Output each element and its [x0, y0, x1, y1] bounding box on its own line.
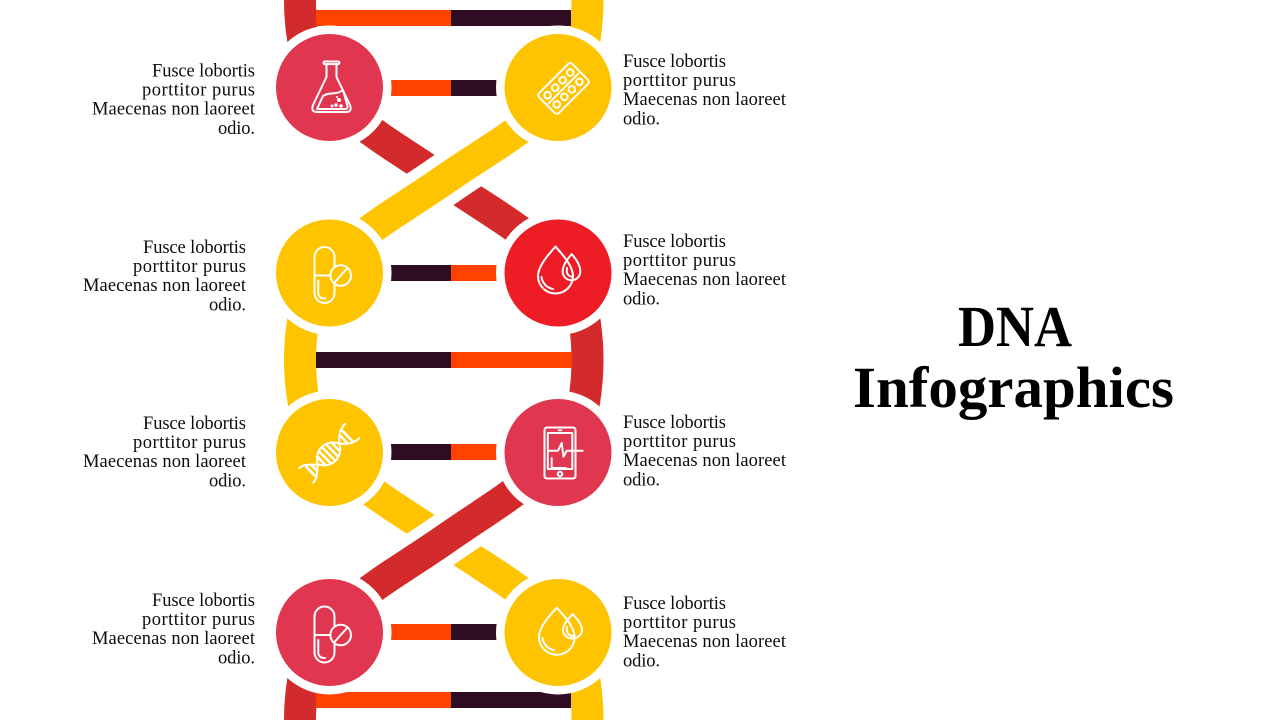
text: left row 3: Maecenas non laoreet — [83, 452, 247, 472]
text: left row 1: odio. — [218, 119, 255, 139]
text: right row 2: Fusce lobortis — [623, 232, 726, 252]
text: right row 3: Fusce lobortis — [623, 413, 726, 433]
bottom long bar — [316, 692, 571, 708]
text: right row 4: Maecenas non laoreet — [623, 632, 787, 652]
text: left row 4: Fusce lobortis — [152, 591, 255, 611]
text: left row 2 — [83, 238, 247, 315]
middle strand arcs — [300, 290, 588, 430]
node: drops red — [496, 211, 620, 335]
text: right row 4: odio. — [623, 651, 660, 671]
text: right row 1: porttitor purus — [623, 71, 736, 91]
text: left row 1 — [92, 62, 256, 139]
node: capsule red — [268, 570, 392, 694]
text: right row 2: odio. — [623, 289, 660, 309]
text: right row 3 — [623, 413, 787, 490]
icon: water drops — [539, 608, 582, 655]
lower crossing strands — [346, 472, 543, 608]
icon: blister pack — [537, 62, 590, 115]
text: left row 2: Maecenas non laoreet — [83, 276, 247, 296]
text: right row 4: porttitor purus — [623, 613, 736, 633]
text: right row 4 — [623, 594, 787, 671]
text: right row 4: Fusce lobortis — [623, 594, 726, 614]
text: left row 4 — [92, 591, 256, 668]
text: left row 2: odio. — [209, 295, 246, 315]
title — [853, 294, 1174, 420]
text: left row 3: porttitor purus — [133, 433, 246, 453]
text: right row 2: Maecenas non laoreet — [623, 270, 787, 290]
text: left row 3: Fusce lobortis — [143, 414, 246, 434]
text: left row 2: Fusce lobortis — [143, 238, 246, 258]
text: left row 4: odio. — [218, 648, 255, 668]
node: drops yellow — [496, 570, 620, 694]
text: left row 1: porttitor purus — [142, 81, 255, 101]
title: Infographics — [853, 355, 1174, 420]
text: left row 3: odio. — [209, 471, 246, 491]
text: right row 1: Maecenas non laoreet — [623, 90, 787, 110]
text: right row 3: porttitor purus — [623, 432, 736, 452]
node: capsule yellow — [268, 211, 392, 335]
top strand arcs — [300, 0, 588, 70]
base pair bars — [316, 10, 572, 708]
icon: dna helix — [299, 424, 359, 483]
title: DNA — [958, 294, 1072, 359]
icon: flask — [312, 62, 351, 112]
node: flask — [268, 26, 392, 150]
text: left row 4: porttitor purus — [142, 610, 255, 630]
row 1 bar — [385, 80, 501, 96]
node: dna — [268, 390, 392, 514]
text: right row 1: Fusce lobortis — [623, 52, 726, 72]
icon: phone with pulse — [544, 428, 583, 478]
text: left row 1: Maecenas non laoreet — [92, 100, 256, 120]
text: left row 4: Maecenas non laoreet — [92, 629, 256, 649]
text: right row 3: Maecenas non laoreet — [623, 451, 787, 471]
helix backbone — [300, 0, 588, 720]
text: right row 2: porttitor purus — [623, 251, 736, 271]
row 4 bar — [385, 624, 501, 640]
text: right row 1 — [623, 52, 787, 129]
row 2 bar — [385, 265, 501, 281]
top long bar — [316, 10, 571, 26]
middle long bar — [316, 352, 572, 368]
text: right row 3: odio. — [623, 470, 660, 490]
icon: capsule and tablet — [314, 606, 351, 662]
icon: water drops — [538, 246, 580, 294]
text: right row 2 — [623, 232, 787, 309]
text: left row 3 — [83, 414, 247, 491]
text: left row 2: porttitor purus — [133, 257, 246, 277]
row 3 bar — [385, 444, 501, 460]
bottom strand arcs — [300, 650, 588, 720]
icon: capsule and tablet — [314, 247, 351, 303]
text: left row 1: Fusce lobortis — [152, 62, 255, 82]
upper crossing strands — [346, 112, 543, 248]
text: right row 1: odio. — [623, 109, 660, 129]
node: blister pack — [496, 26, 620, 150]
node: phone — [496, 390, 620, 514]
